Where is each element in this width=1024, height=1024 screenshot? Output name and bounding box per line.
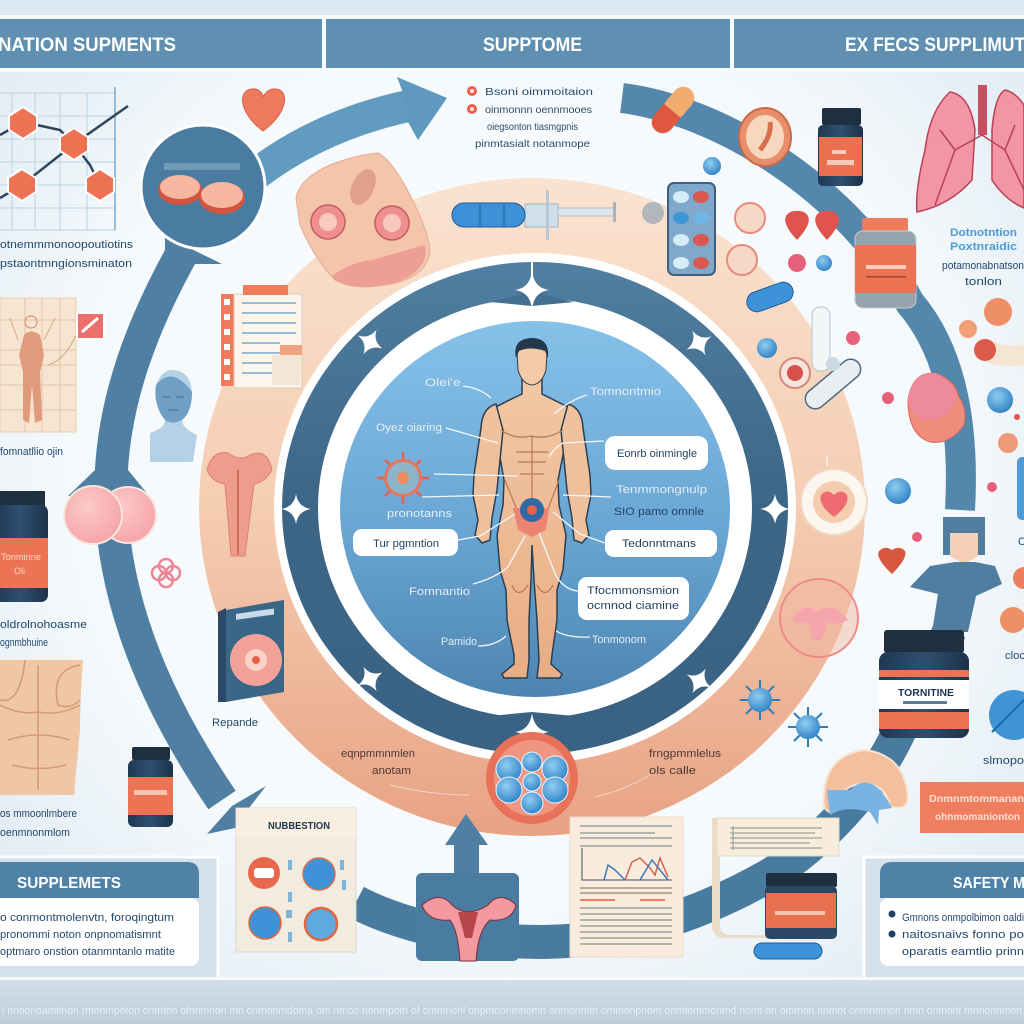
right caption under lungs xyxy=(942,227,1024,288)
chart top-left xyxy=(0,87,128,230)
flower icon xyxy=(152,559,180,587)
body labels: SIO pamo omnle xyxy=(614,506,704,518)
capsule bottom cell xyxy=(486,732,578,824)
navy ring xyxy=(282,262,788,754)
pills upper right xyxy=(647,82,791,175)
orange note xyxy=(920,782,1024,833)
torso xyxy=(0,660,83,795)
callout text top centre: Bsoni oimmoitaion xyxy=(485,86,593,98)
far right pills lower xyxy=(983,567,1024,767)
icon: head profile xyxy=(150,370,197,462)
pill circle top-left xyxy=(141,125,265,249)
arrowheads xyxy=(68,77,447,845)
body labels: Tonmonom xyxy=(592,634,646,646)
right caption under lungs: Dotnotntion xyxy=(950,227,1017,239)
far right pills lower: cloc xyxy=(1005,650,1024,662)
body labels: Pamido xyxy=(441,636,477,648)
white callouts: ocmnod ciamine xyxy=(587,600,679,612)
supplement jar large xyxy=(879,630,969,738)
report stack xyxy=(712,818,839,938)
ring bottom labels: anotam xyxy=(372,765,411,777)
ring bottom labels: eqnpmmnmlen xyxy=(341,748,415,760)
red tag xyxy=(76,312,105,340)
scattered pills far right xyxy=(878,298,1024,574)
supplement bottle right xyxy=(855,218,916,308)
white outer band xyxy=(274,253,796,763)
body labels: Tenmmongnulp xyxy=(616,484,707,496)
jar bottom xyxy=(754,873,837,959)
white callouts xyxy=(353,436,717,620)
body labels xyxy=(376,377,707,648)
caption under jar: oldrolnohoasme xyxy=(0,619,87,631)
human figure xyxy=(473,338,591,678)
torso caption: oenmnonmlom xyxy=(0,827,70,839)
small hearts and tablets xyxy=(642,202,839,275)
poster caption: fomnatllio ojin xyxy=(0,446,63,458)
footer xyxy=(0,977,1024,1024)
callout text top centre: oinmonnn oennmooes xyxy=(485,104,592,116)
panel: supplements: optmaro onstion otanmntanlo matite xyxy=(0,946,175,958)
leader lines xyxy=(422,386,611,646)
header band xyxy=(0,0,1024,72)
orange note: Dnmnmtommanan xyxy=(929,794,1024,805)
left tablets pink xyxy=(64,486,156,544)
blister pack xyxy=(668,183,715,275)
supplement jar left xyxy=(0,491,48,602)
book xyxy=(218,600,284,702)
body labels: Oyez oiaring xyxy=(376,422,442,434)
peach ring xyxy=(199,178,865,836)
icon: heart xyxy=(243,89,285,131)
panel: safety xyxy=(864,857,1024,980)
icon: skin block xyxy=(296,153,430,287)
callout text top centre: oiegsonton tiasmgpnis xyxy=(487,121,578,133)
chart caption xyxy=(0,239,134,270)
supplement jar left: Tonminne xyxy=(1,552,41,563)
torso caption: os mmoonlmbere xyxy=(0,808,77,820)
body labels: pronotanns xyxy=(387,508,453,520)
virus icon left of body xyxy=(377,452,429,504)
caption under jar: ognmbhuine xyxy=(0,637,48,649)
white callouts: Tedonntmans xyxy=(622,538,697,550)
report page xyxy=(570,817,683,957)
uterus tile xyxy=(416,873,519,961)
chart caption: pstaontmngionsminaton xyxy=(0,258,132,270)
heading: left: NATION SUPMENTS xyxy=(0,35,176,56)
body labels: Olei'e xyxy=(425,377,461,389)
clinician icon xyxy=(910,517,1002,632)
outer cycle arrows xyxy=(111,98,961,942)
circular badge heart xyxy=(801,455,867,560)
body labels: Fomnantio xyxy=(409,586,470,598)
panel: nutrition card: NUBBESTION xyxy=(268,820,330,832)
torso caption xyxy=(0,808,77,839)
callout text top centre: pinmtasialt notanmope xyxy=(475,138,590,150)
white callouts: Eonrb oinmingle xyxy=(617,448,697,460)
uterus icon left xyxy=(207,453,272,556)
panel: supplements: o conmontmolenvtn, foroqingtum xyxy=(0,912,174,924)
callout text top centre xyxy=(467,86,593,150)
jar label: TORNITINE xyxy=(898,688,954,699)
panel: safety: oparatis eamtlio prinn xyxy=(902,946,1024,958)
right caption under lungs: Poxtnraidic xyxy=(950,241,1017,253)
central disc xyxy=(340,321,730,697)
icon: lungs xyxy=(917,85,1024,212)
icon: syringe capsule xyxy=(452,190,616,240)
right caption under lungs: tonlon xyxy=(965,276,1002,288)
ring bottom labels: frngpmmlelus xyxy=(649,748,722,760)
heading: centre: SUPPTOME xyxy=(483,35,582,56)
book caption: Repande xyxy=(212,717,258,729)
panel: supplements: pronommi noton onpnomatismnt xyxy=(0,929,161,941)
ring markers xyxy=(281,262,790,755)
white callouts: Tfocmmonsmion xyxy=(587,585,679,597)
up arrow xyxy=(445,814,488,875)
panel: supplements xyxy=(0,857,218,980)
jar lower left xyxy=(128,747,173,827)
panel heading: SUPPLEMETS xyxy=(17,875,121,892)
far right pills lower: slmopo xyxy=(983,755,1024,767)
supplement jar upper right xyxy=(818,108,863,186)
white callouts: Tur pgmntion xyxy=(373,538,439,550)
panel: nutrition card xyxy=(236,808,356,952)
brain organ xyxy=(824,750,908,825)
panel: safety: naitosnaivs fonno po xyxy=(902,929,1024,941)
organ circle xyxy=(780,579,858,657)
ring bottom labels: ols calle xyxy=(649,765,696,777)
body labels: Tomnontmio xyxy=(590,386,661,398)
supplement jar left: Oli xyxy=(14,566,25,576)
orange note: ohnmomanionton xyxy=(935,812,1020,823)
virus icons lower xyxy=(740,680,828,747)
capsules mid right xyxy=(744,279,865,413)
anatomy chart poster xyxy=(0,298,105,432)
ring bottom labels xyxy=(341,748,722,797)
document pink notes xyxy=(221,285,302,388)
caption under jar xyxy=(0,619,87,649)
chart caption: otnemmmonoopoutiotins xyxy=(0,239,134,251)
